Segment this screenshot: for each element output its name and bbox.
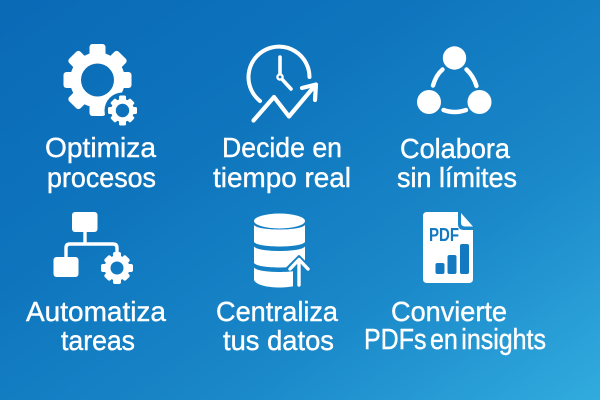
card: Colabora sin límites bbox=[397, 46, 517, 193]
icon: PDF document with bars: PDF bbox=[429, 225, 459, 245]
label: Optimiza procesos: Optimiza bbox=[45, 132, 156, 163]
icon: database with upload arrow bbox=[254, 214, 308, 288]
label: Colabora sin límites bbox=[397, 133, 517, 193]
label: Automatiza tareas: Automatiza bbox=[26, 296, 166, 327]
card: Decide en tiempo real bbox=[213, 47, 351, 193]
card: Optimiza procesos bbox=[45, 44, 156, 193]
label: Decide en tiempo real: tiempo real bbox=[213, 162, 351, 193]
label: Colabora sin límites: sin límites bbox=[397, 162, 517, 193]
card: Convierte PDFs en insights bbox=[364, 212, 546, 356]
card: Centraliza tus datos bbox=[216, 214, 338, 356]
icon: connected circles bbox=[417, 46, 492, 114]
label: Convierte PDFs en insights: PDFs en insights bbox=[364, 324, 546, 356]
label: Centraliza tus datos bbox=[216, 296, 338, 356]
icon: gears bbox=[64, 44, 137, 126]
label: Convierte PDFs en insights bbox=[364, 296, 546, 356]
icon: PDF document with bars bbox=[423, 212, 473, 283]
label: Decide en tiempo real: Decide en bbox=[222, 132, 342, 163]
icon: clock with rising arrow bbox=[249, 47, 316, 120]
label: Optimiza procesos bbox=[45, 132, 156, 193]
label: Optimiza procesos: procesos bbox=[47, 162, 156, 193]
card: Automatiza tareas bbox=[26, 212, 166, 356]
label: Colabora sin límites: Colabora bbox=[400, 133, 510, 164]
label: Automatiza tareas: tareas bbox=[61, 325, 135, 356]
label: Decide en tiempo real bbox=[213, 132, 351, 193]
icon: flowchart with gear bbox=[54, 212, 133, 284]
label: Centraliza tus datos: tus datos bbox=[223, 325, 334, 356]
label: Convierte PDFs en insights: Convierte bbox=[391, 296, 507, 327]
label: Automatiza tareas bbox=[26, 296, 166, 356]
label: Centraliza tus datos: Centraliza bbox=[216, 296, 338, 327]
